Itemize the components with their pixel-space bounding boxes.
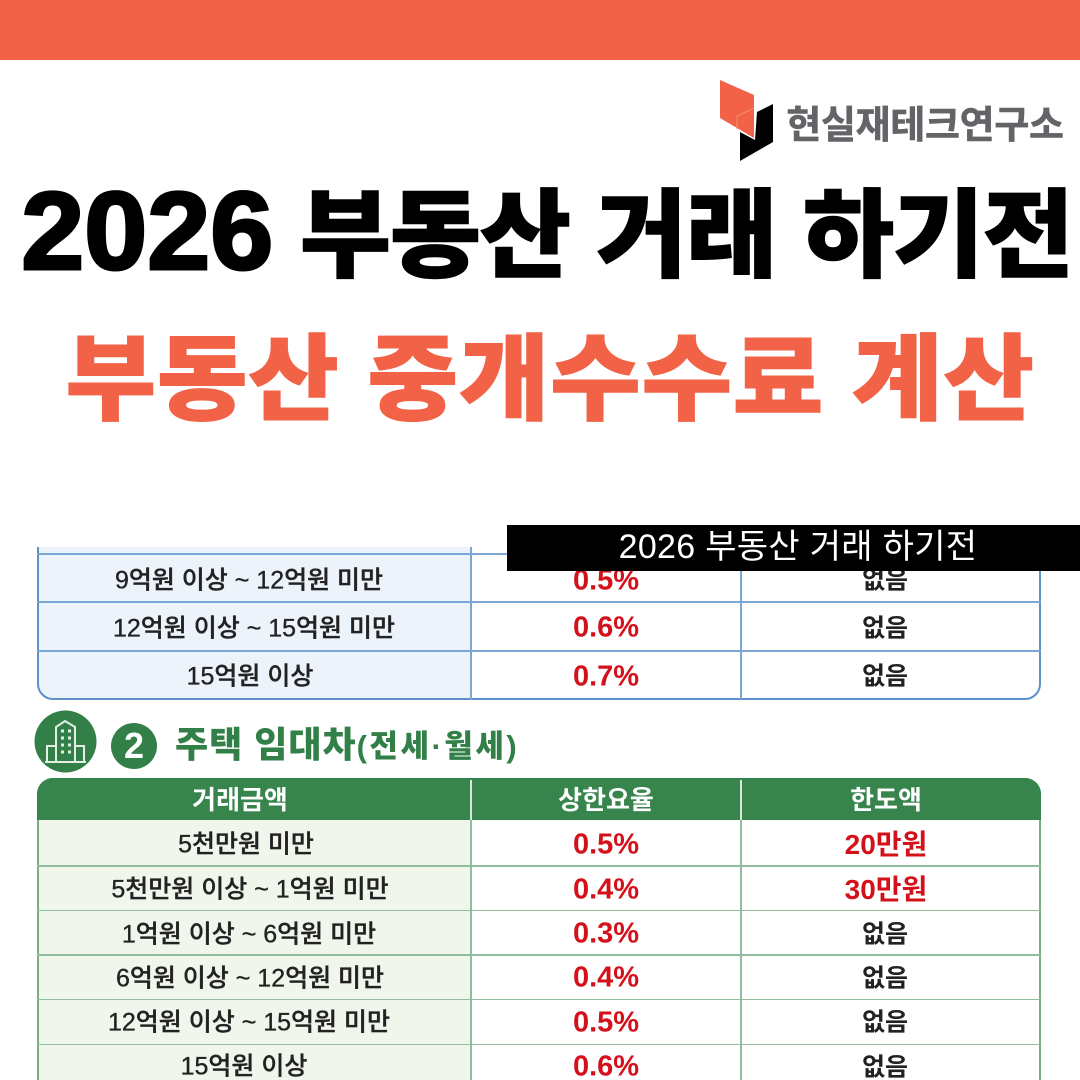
text: 0.6% <box>573 612 639 644</box>
overlay label <box>507 525 1080 571</box>
overlay text: 2026 부동산 거래 하기전 <box>619 528 977 566</box>
text: 없음 <box>862 662 908 690</box>
header dividers <box>470 780 472 820</box>
text: 12억원 이상 ~ 15억원 미만 <box>108 1008 390 1036</box>
text: 15억원 이상 <box>187 662 313 690</box>
text: 0.3% <box>573 918 639 950</box>
sales rows: 9억원 이상 ~ 12억원 미만 <box>115 566 383 594</box>
text: 상한요율 <box>558 785 654 815</box>
text: 12억원 이상 ~ 15억원 미만 <box>113 614 395 642</box>
title: 2026 부동산 거래 하기전 <box>21 158 1073 297</box>
section number badge <box>111 723 157 769</box>
icon: logo mark <box>720 80 773 161</box>
panel: rent fee table <box>37 778 1041 1080</box>
table frame <box>37 517 1041 700</box>
badge number: 2 <box>124 725 144 766</box>
text: 0.5% <box>573 1006 639 1038</box>
text: 없음 <box>862 566 908 594</box>
text: 30만원 <box>845 874 927 905</box>
rent frame <box>37 778 1041 1080</box>
text: 없음 <box>862 920 908 948</box>
section heading: 주택 임대차(전세·월세) <box>175 724 519 765</box>
text: 5천만원 이상 ~ 1억원 미만 <box>111 876 389 904</box>
text: 20만원 <box>845 829 927 860</box>
top banner <box>0 0 1080 60</box>
rent rows: 5천만원 미만 <box>178 830 314 858</box>
text: 0.5% <box>573 828 639 860</box>
logo text: 현실재테크연구소 <box>786 105 1064 147</box>
text: 없음 <box>862 1008 908 1036</box>
logo <box>720 80 1064 161</box>
text: 0.7% <box>573 660 639 692</box>
table header <box>37 778 1041 820</box>
panel: sales fee table <box>37 547 1041 700</box>
icon: building <box>34 710 96 772</box>
text: 한도액 <box>850 785 922 815</box>
text: 0.4% <box>573 962 639 994</box>
text: 1억원 이상 ~ 6억원 미만 <box>122 920 376 948</box>
text: 15억원 이상 <box>181 1052 307 1080</box>
text: 0.4% <box>573 874 639 906</box>
text: 없음 <box>862 964 908 992</box>
text: 없음 <box>862 614 908 642</box>
subtitle: 부동산 중개수수료 계산 <box>65 327 1035 432</box>
rent header labels: 거래금액 <box>192 785 288 815</box>
text: 0.5% <box>573 564 639 596</box>
text: 6억원 이상 ~ 12억원 미만 <box>116 964 384 992</box>
